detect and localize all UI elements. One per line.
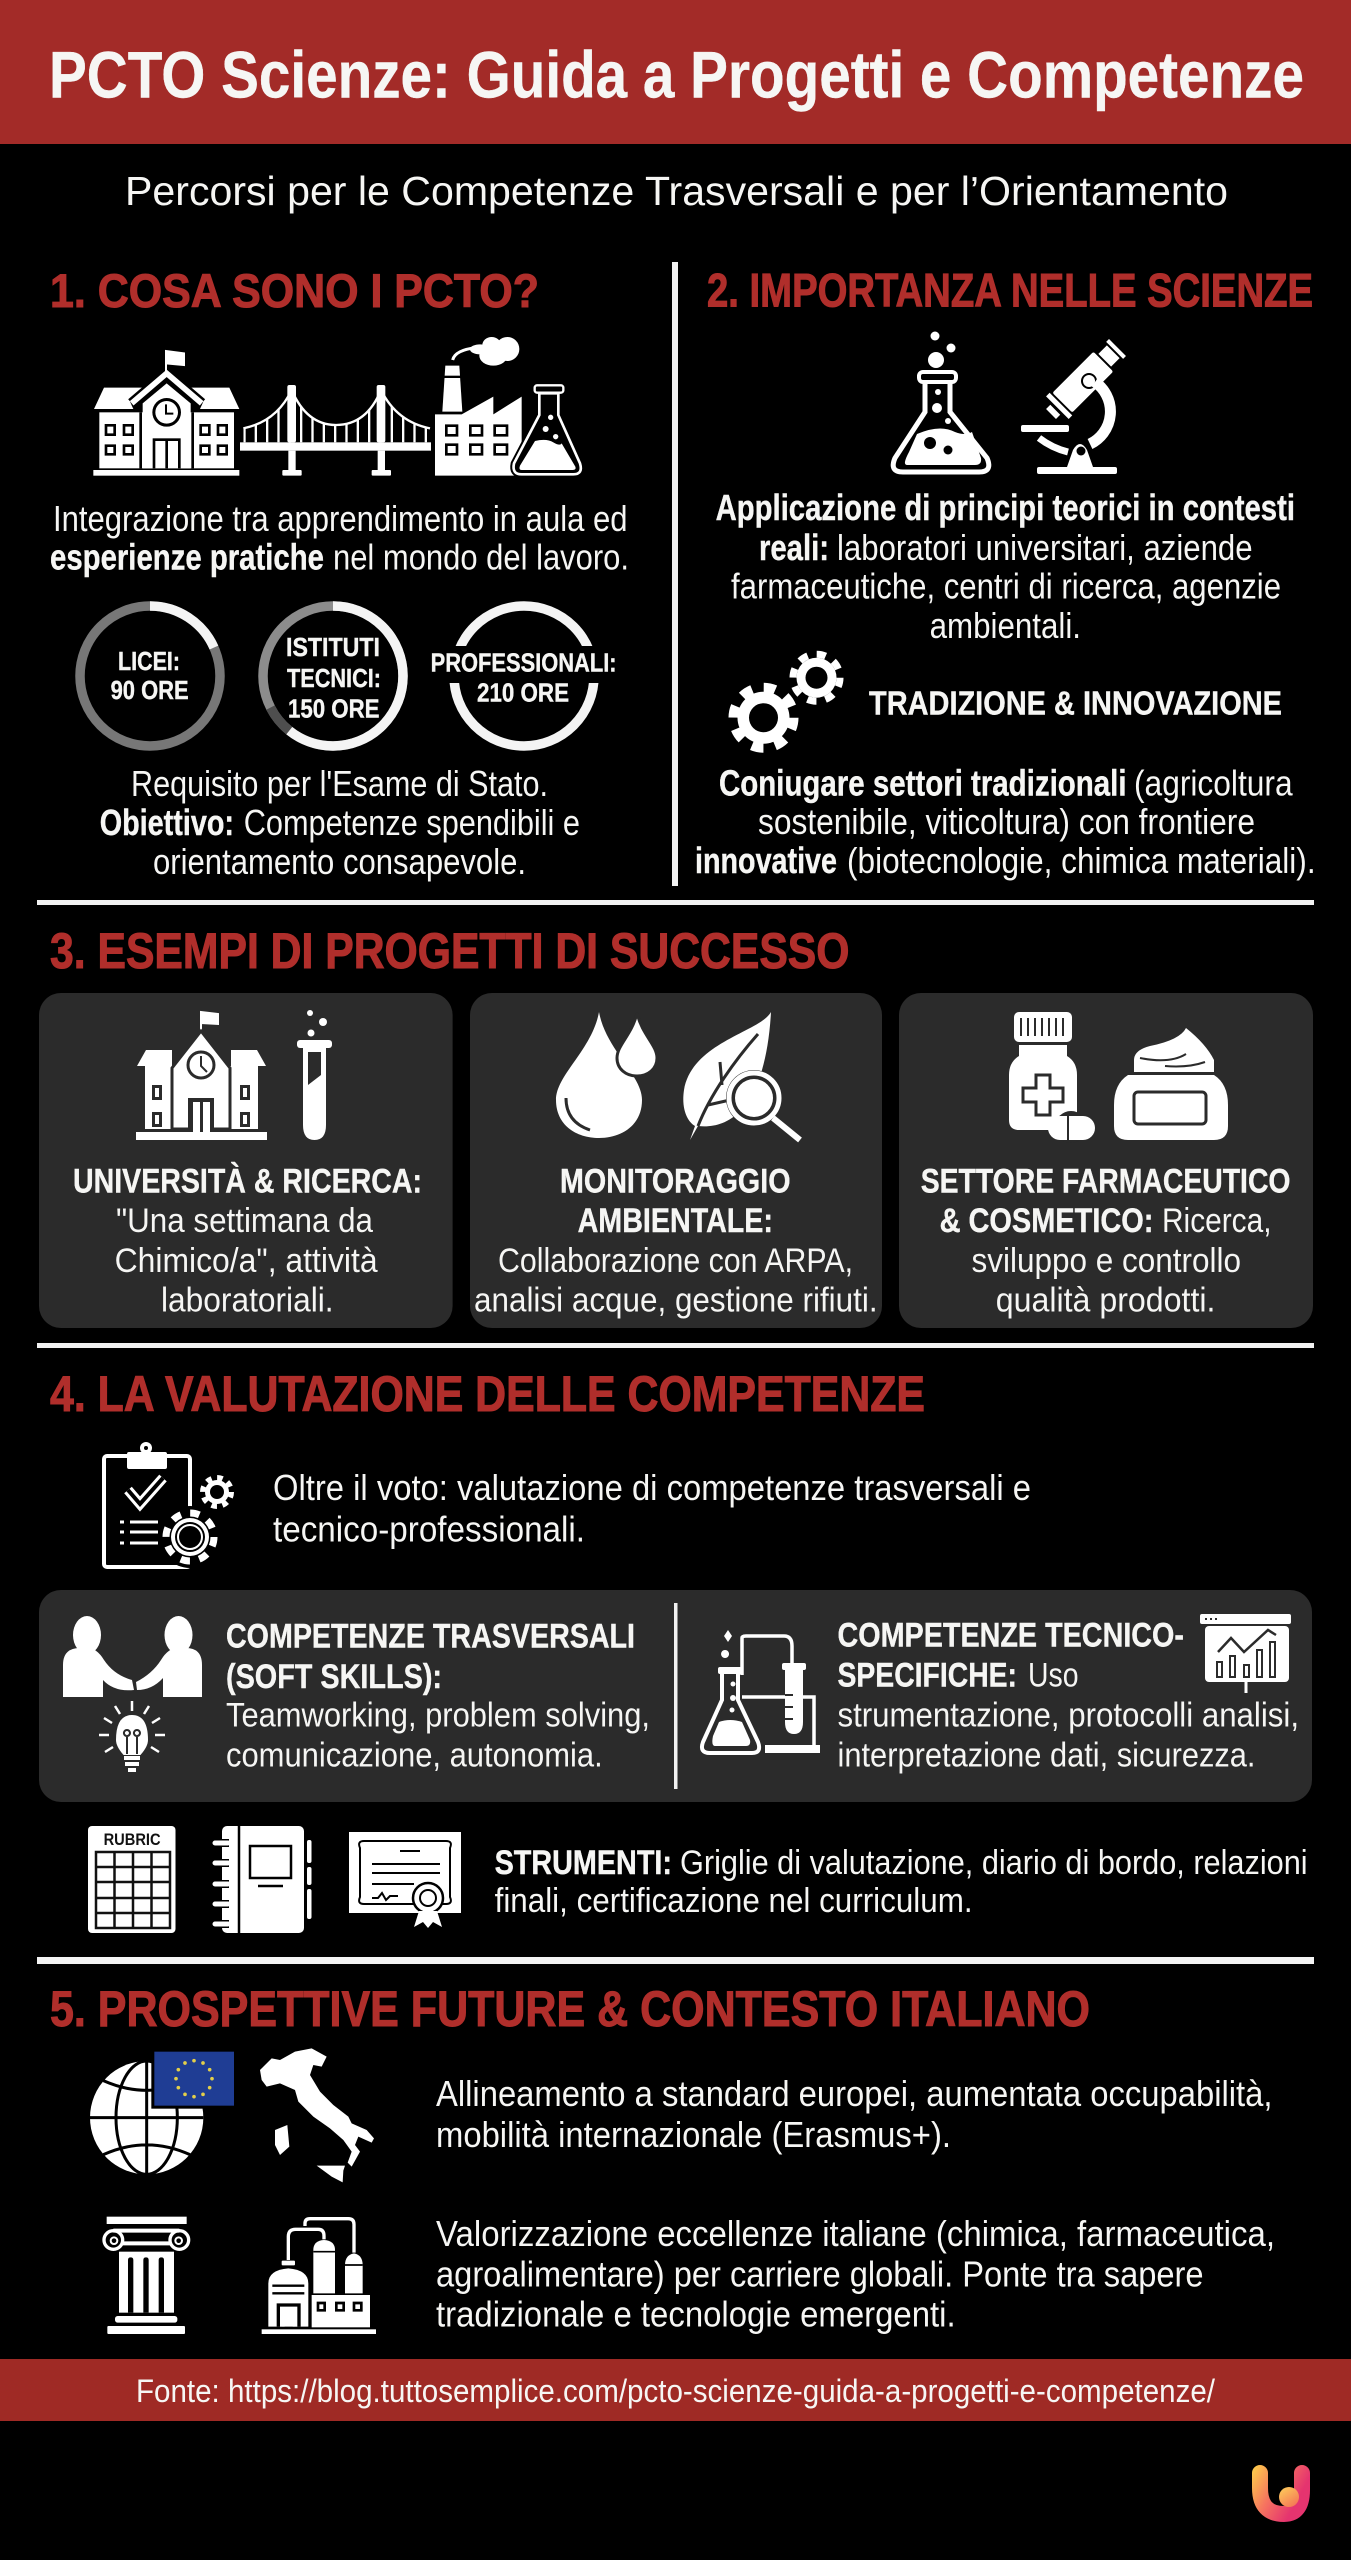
ring: istituti tecnici 150 ore	[263, 606, 403, 746]
text: competenze trasversali: COMPETENZE TRASVERSALI	[226, 1618, 635, 1656]
text: settore farmaceutico	[921, 1163, 1290, 1320]
icon: handshake and light bulb	[63, 1616, 202, 1770]
text: universita: "Una settimana da	[116, 1202, 373, 1240]
icon: medicine bottle and cream jar	[1009, 1012, 1228, 1143]
ring: istituti tecnici 150 ore: 150 ORE	[288, 694, 380, 724]
text: competenze tecnico-specifiche: strumentazione, protocolli analisi,	[838, 1697, 1299, 1735]
text: standard europei: Allineamento a standard europei, aumentata occupabilità,	[436, 2073, 1272, 2114]
icon: school, bridge, factory and flask	[93, 337, 581, 476]
text: universita: UNIVERSITÀ & RICERCA:	[73, 1163, 422, 1201]
ring: licei 90 ore	[80, 606, 220, 746]
strumenti text	[495, 1844, 1308, 1920]
ring: professionali 210 ore	[431, 606, 617, 746]
application text: laboratori universitari, aziende	[837, 527, 1253, 568]
application text	[716, 487, 1295, 646]
ring: istituti tecnici 150 ore: TECNICI:	[287, 663, 381, 693]
icon: certificate	[349, 1832, 461, 1928]
strumenti text: STRUMENTI:	[495, 1844, 672, 1882]
tradition text: innovative	[695, 840, 837, 881]
text: settore farmaceutico: qualità prodotti.	[996, 1282, 1216, 1320]
icon: rubric grid: RUBRIC	[104, 1830, 161, 1849]
text: competenze trasversali: Teamworking, problem solving,	[226, 1697, 650, 1735]
text: eccellenze italiane: tradizionale e tecnologie emergenti.	[436, 2294, 956, 2335]
text: monitoraggio	[474, 1163, 878, 1320]
text: settore farmaceutico: & COSMETICO:	[940, 1202, 1153, 1240]
header banner	[0, 0, 1351, 144]
icon: water drops and leaf	[556, 1012, 800, 1140]
icon: rubric grid	[88, 1826, 176, 1933]
intro text: Oltre il voto: valutazione di competenze trasversali e	[273, 1467, 1031, 1508]
strumenti text: finali, certificazione nel curriculum.	[495, 1882, 973, 1920]
panel: universita e ricerca	[39, 993, 453, 1328]
text: eccellenze italiane	[436, 2213, 1275, 2335]
text: monitoraggio: MONITORAGGIO	[560, 1163, 790, 1201]
text: eccellenze italiane: Valorizzazione eccellenze italiane (chimica, farmaceutica,	[436, 2213, 1275, 2254]
text: competenze trasversali: (SOFT SKILLS):	[226, 1658, 442, 1696]
text: competenze tecnico-specifiche: interpretazione dati, sicurezza.	[838, 1737, 1256, 1775]
section 1: cosa sono i PCTO	[50, 264, 629, 882]
icon: clipboard with gears	[104, 1442, 231, 1568]
intro text: tecnico-professionali.	[273, 1509, 585, 1550]
section 2: importanza nelle scienze	[695, 264, 1316, 881]
text: competenze tecnico-specifiche: SPECIFICHE:	[838, 1657, 1017, 1695]
section 4: valutazione delle competenze	[39, 1366, 1312, 1933]
subtitle: Percorsi per le Competenze Trasversali e per l’Orientamento	[125, 168, 1228, 214]
text: competenze trasversali	[226, 1618, 650, 1775]
application text: reali:	[759, 527, 829, 568]
text: eccellenze italiane: agroalimentare) per carriere globali. Ponte tra sapere	[436, 2254, 1204, 2295]
ring: professionali 210 ore: PROFESSIONALI:	[431, 648, 617, 678]
requirement text	[100, 763, 580, 882]
text: universita: Chimico/a", attività	[115, 1242, 378, 1280]
footer source band	[0, 2359, 1351, 2421]
text: settore farmaceutico: sviluppo e controllo	[972, 1242, 1241, 1280]
text: monitoraggio: analisi acque, gestione rifiuti.	[474, 1282, 878, 1320]
heading 5: 5. PROSPETTIVE FUTURE & CONTESTO ITALIANO	[50, 1981, 1090, 2037]
ring: istituti tecnici 150 ore: ISTITUTI	[286, 632, 380, 662]
icon: chemical plant	[262, 2219, 376, 2334]
text: settore farmaceutico: SETTORE FARMACEUTICO	[921, 1163, 1290, 1201]
heading 4: 4. LA VALUTAZIONE DELLE COMPETENZE	[50, 1366, 925, 1422]
application text: ambientali.	[930, 605, 1081, 646]
text: competenze tecnico-specifiche: COMPETENZE TECNICO-	[838, 1617, 1184, 1655]
intro text	[50, 498, 629, 578]
ring: licei 90 ore: LICEI:	[118, 646, 180, 676]
tradition text	[695, 763, 1316, 881]
text: competenze tecnico-specifiche: Uso	[1028, 1657, 1078, 1695]
tradition text: sostenibile, viticoltura) con frontiere	[758, 801, 1255, 842]
panel: competenze	[39, 1590, 1312, 1802]
icon: presentation chart	[1200, 1614, 1291, 1693]
ring: professionali 210 ore: 210 ORE	[477, 678, 569, 708]
application text: farmaceutiche, centri di ricerca, agenzie	[731, 566, 1281, 607]
section 5: prospettive future	[50, 1981, 1275, 2335]
text: settore farmaceutico: Ricerca,	[1162, 1202, 1272, 1240]
heading 1: 1. COSA SONO I PCTO?	[50, 264, 539, 317]
icon: notebook	[215, 1826, 312, 1933]
icon: flask	[893, 332, 989, 472]
icon: gears	[734, 654, 840, 748]
icon: ionic column	[104, 2217, 189, 2334]
text: universita	[73, 1163, 422, 1320]
tradition text: Coniugare settori tradizionali	[719, 763, 1126, 804]
text: competenze tecnico-specifiche	[838, 1617, 1299, 1775]
text: competenze trasversali: comunicazione, autonomia.	[226, 1737, 603, 1775]
text: monitoraggio: Collaborazione con ARPA,	[498, 1242, 853, 1280]
requirement text: Competenze spendibili e	[244, 802, 580, 843]
intro text: nel mondo del lavoro.	[333, 536, 629, 578]
icon: lab glassware	[702, 1630, 820, 1753]
requirement text: Obiettivo:	[100, 802, 234, 843]
requirement text: orientamento consapevole.	[153, 841, 526, 882]
intro text: Integrazione tra apprendimento in aula ed	[53, 498, 628, 539]
text: monitoraggio: AMBIENTALE:	[578, 1202, 773, 1240]
icon: map of Italy	[260, 2048, 374, 2182]
tradition text: (agricoltura	[1134, 763, 1293, 804]
text: universita: laboratoriali.	[161, 1282, 334, 1320]
icon: logo	[1260, 2473, 1302, 2514]
ring: licei 90 ore: 90 ORE	[111, 675, 189, 705]
icon: globe with EU flag	[90, 2049, 239, 2174]
section 3: esempi di progetti	[39, 923, 1313, 1328]
intro text: esperienze pratiche	[50, 536, 324, 578]
intro text	[273, 1467, 1031, 1550]
requirement text: Requisito per l'Esame di Stato.	[131, 763, 548, 804]
panel: monitoraggio ambientale	[470, 993, 882, 1328]
footer source band: Fonte: https://blog.tuttosemplice.com/pcto-scienze-guida-a-progetti-e-competenze/	[136, 2373, 1215, 2409]
subheading: tradizione e innovazione: TRADIZIONE & INNOVAZIONE	[869, 685, 1282, 722]
icon: university and test tube	[136, 1010, 332, 1140]
heading 3: 3. ESEMPI DI PROGETTI DI SUCCESSO	[50, 923, 850, 979]
icon: microscope	[1021, 336, 1129, 474]
panel: settore farmaceutico e cosmetico	[899, 993, 1313, 1328]
text: standard europei: mobilità internazionale (Erasmus+).	[436, 2114, 951, 2155]
text: standard europei	[436, 2073, 1272, 2155]
